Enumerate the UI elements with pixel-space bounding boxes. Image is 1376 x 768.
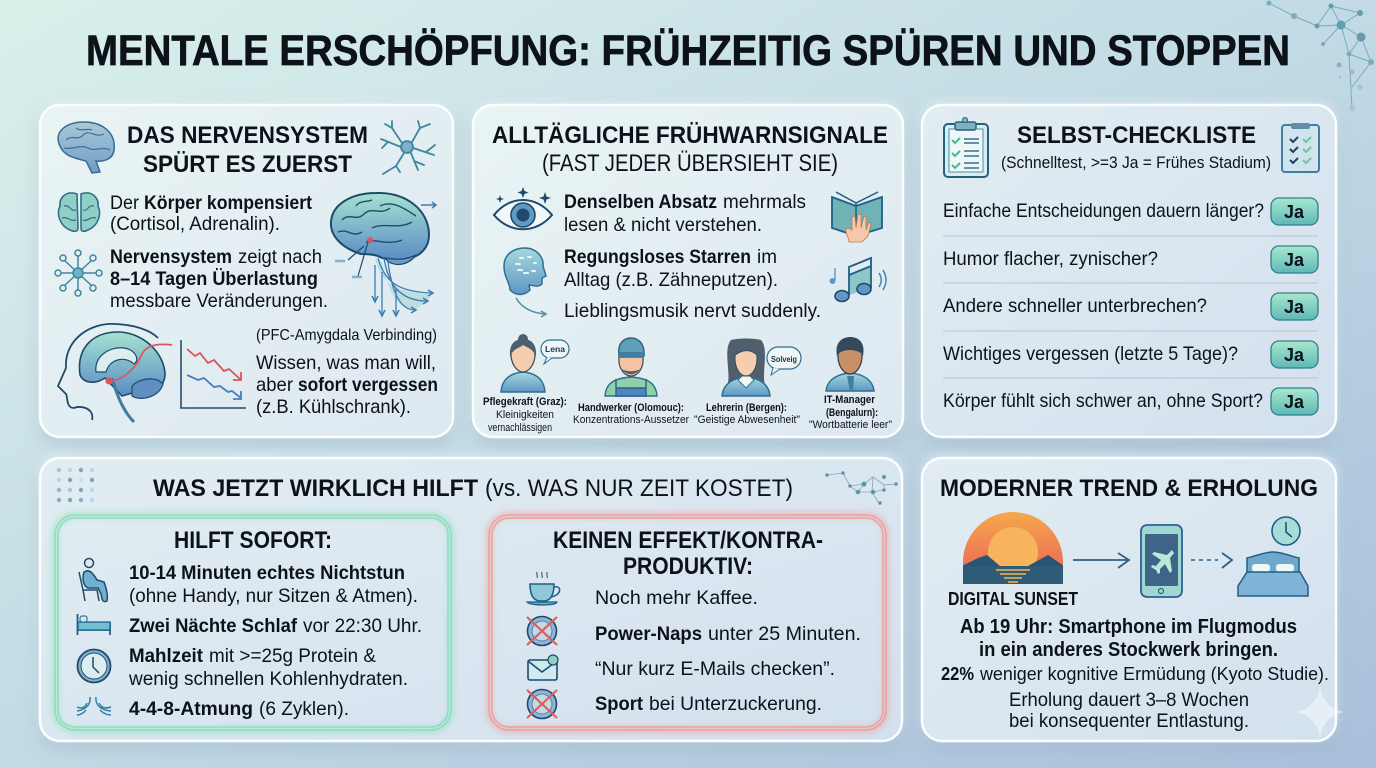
- caption: craftsman: Handwerker (Olomouc):: [578, 402, 684, 414]
- text: favourite music: Lieblingsmusik nervt suddenly.: [564, 300, 821, 322]
- text: motionless staring: im: [757, 246, 777, 268]
- text: knowing: [256, 352, 438, 418]
- text: 22 percent: weniger kognitive Ermüdung (Kyoto Studie).: [979, 663, 1329, 684]
- icon: sitting person: [79, 558, 107, 602]
- heading: what really helps: (vs. WAS NUR ZEIT KOSTET): [485, 475, 793, 502]
- row 3: [943, 293, 1318, 320]
- text: motionless staring: Regungsloses Starren: [564, 246, 751, 268]
- caption: nurse: Kleinigkeiten: [496, 409, 554, 421]
- text: breathing: 4-4-8-Atmung: [129, 698, 253, 720]
- icon: arrow from head: [516, 298, 546, 317]
- caption: teacher: "Geistige Abwesenheit": [694, 414, 800, 426]
- caption: nurse: vernachlässigen: [488, 422, 552, 434]
- icon: neuron: [381, 121, 435, 174]
- icon: sunset: [963, 512, 1063, 584]
- text: two nights: [129, 615, 422, 637]
- caption: teacher: Lehrerin (Bergen):: [706, 402, 787, 414]
- person: nurse: Lena: [545, 345, 566, 354]
- row 4: Wichtiges vergessen (letzte 5 Tage)?: [943, 343, 1238, 365]
- panel: early warning signs: [473, 105, 903, 437]
- text: power naps: Power-Naps: [595, 623, 702, 645]
- text: knowing: sofort vergessen: [298, 374, 438, 396]
- person: IT manager: [826, 337, 874, 391]
- text: body compensates: Der: [110, 192, 139, 214]
- icon: music notes: [830, 258, 886, 302]
- chart: decline: [181, 340, 246, 408]
- text: e-mails: “Nur kurz E-Mails checken”.: [595, 658, 835, 680]
- heading: warning signs: [492, 122, 888, 177]
- text: 22 percent: 22%: [941, 663, 974, 684]
- row 5: Körper fühlt sich schwer an, ohne Sport?: [943, 390, 1263, 412]
- text: body compensates: [110, 192, 312, 235]
- person: nurse: [501, 334, 569, 392]
- caption: IT manager: "Wortbatterie leer": [809, 419, 892, 431]
- text: breathing: (6 Zyklen).: [259, 698, 349, 720]
- text: knowing: Wissen, was man will,: [256, 352, 436, 374]
- arrow: sunset to phone: [1073, 553, 1129, 568]
- person: craftsman: [605, 338, 657, 396]
- text: meal: [128, 645, 408, 690]
- text: knowing: (z.B. Kühlschrank).: [256, 396, 411, 418]
- heading: warning signs: (FAST JEDER ÜBERSIEHT SIE): [542, 150, 838, 177]
- heading: no effect: KEINEN EFFEKT/KONTRA-: [553, 527, 823, 554]
- text: nervous system changes: 8–14 Tagen Überlastung: [110, 267, 318, 290]
- text: body compensates: (Cortisol, Adrenalin).: [110, 213, 280, 235]
- text: doing nothing: [129, 562, 418, 607]
- caption: craftsman: [573, 402, 689, 426]
- arrow head: [1222, 553, 1232, 568]
- text: body compensates: Körper kompensiert: [144, 192, 312, 214]
- text: recovery: Erholung dauert 3–8 Wochen: [1009, 690, 1249, 711]
- person: teacher: [722, 338, 801, 396]
- icon: bed: [1238, 552, 1308, 596]
- icon: large brain with arrows: [331, 193, 436, 316]
- text: from 7pm: Ab 19 Uhr: Smartphone im Flugmodus: [960, 616, 1297, 638]
- icon: network: [55, 250, 102, 296]
- row 3: Andere schneller unterbrechen?: [943, 295, 1207, 317]
- row 1: Einfache Entscheidungen dauern länger?: [943, 200, 1264, 222]
- row 2: Ja: [1284, 250, 1305, 270]
- heading: nervous system: [127, 122, 368, 178]
- text: nervous system changes: messbare Veränderungen.: [110, 290, 328, 312]
- text: meal: Mahlzeit: [129, 645, 203, 667]
- text: recovery: [1009, 690, 1249, 732]
- heading: no effect: PRODUKTIV:: [623, 553, 753, 580]
- text: nervous system changes: zeigt nach: [238, 246, 322, 268]
- icon: clipboard left: [944, 118, 988, 177]
- text: power naps: unter 25 Minuten.: [708, 623, 861, 645]
- text: from 7pm: [960, 616, 1297, 661]
- row 5: Ja: [1284, 392, 1305, 412]
- text: sport: Sport: [595, 693, 643, 715]
- heading: helps immediately: HILFT SOFORT:: [174, 527, 332, 554]
- icon: bed: [78, 614, 110, 635]
- icon: head section: [58, 324, 172, 422]
- caption: IT manager: IT-Manager: [824, 394, 876, 406]
- icon: eye: [494, 187, 552, 229]
- icon: crossed nap: [527, 616, 557, 646]
- heading: nervous system: SPÜRT ES ZUERST: [143, 151, 352, 178]
- label: digital sunset: DIGITAL SUNSET: [948, 589, 1078, 609]
- text: motionless staring: [564, 246, 778, 291]
- icon: clock: [78, 650, 110, 682]
- text: same paragraph: lesen & nicht verstehen.: [564, 214, 762, 236]
- panel: self checklist: [922, 105, 1336, 437]
- caption: IT manager: (Bengalurn):: [826, 407, 878, 419]
- text: coffee: Noch mehr Kaffee.: [595, 587, 758, 609]
- decoration: dot grid: [57, 468, 94, 502]
- heading: checklist: (Schnelltest, >=3 Ja = Frühes Stadium): [1001, 154, 1271, 172]
- icon: coffee cup: [527, 572, 560, 605]
- panel: nervous system: [40, 105, 453, 437]
- caption: nurse: [483, 396, 567, 434]
- row 4: Ja: [1284, 345, 1305, 365]
- heading: checklist: SELBST-CHECKLISTE: [1017, 122, 1256, 149]
- icon: book with hand: [832, 192, 882, 242]
- text: recovery: bei konsequenter Entlastung.: [1009, 711, 1249, 732]
- text: breathing: [129, 698, 349, 720]
- icon: brain: [58, 122, 114, 173]
- panel: modern trend: [922, 458, 1336, 741]
- row 3: Ja: [1284, 297, 1305, 317]
- icon: phone: [1141, 525, 1182, 597]
- text: nervous system changes: Nervensystem: [110, 246, 232, 268]
- text: power naps: [595, 623, 861, 645]
- sparkle: [1296, 687, 1344, 737]
- row 1: Ja: [1284, 202, 1305, 222]
- icon: head with thinking dots: [504, 248, 546, 294]
- icon: clipboard right: [1282, 123, 1319, 172]
- row 2: [943, 246, 1318, 273]
- text: two nights: Zwei Nächte Schlaf: [129, 615, 297, 637]
- text: PFC label: (PFC-Amygdala Verbinding): [256, 327, 437, 344]
- text: nervous system changes: [110, 246, 328, 312]
- text: from 7pm: in ein anderes Stockwerk bringen.: [979, 639, 1278, 661]
- heading: nervous system: DAS NERVENSYSTEM: [127, 122, 368, 149]
- heading: checklist: [1001, 122, 1271, 172]
- row 4: [943, 341, 1318, 368]
- panel: what helps: [40, 458, 902, 741]
- text: two nights: vor 22:30 Uhr.: [303, 615, 422, 637]
- icon: envelope: [528, 655, 558, 680]
- panel: helps immediately: [55, 515, 451, 730]
- icon: two hemispheres: [58, 193, 100, 231]
- text: doing nothing: (ohne Handy, nur Sitzen & Atmen).: [129, 585, 418, 607]
- text: doing nothing: 10-14 Minuten echtes Nichtstun: [129, 562, 405, 584]
- icon: clock: [1272, 517, 1300, 545]
- heading: no effect: [553, 527, 823, 580]
- heading: warning signs: ALLTÄGLICHE FRÜHWARNSIGNALE: [492, 122, 888, 149]
- caption: nurse: Pflegekraft (Graz):: [483, 396, 567, 408]
- row 2: Humor flacher, zynischer?: [943, 248, 1158, 270]
- text: knowing: aber: [256, 374, 293, 396]
- caption: teacher: [694, 402, 800, 426]
- icon: crossed sport: [527, 690, 557, 718]
- text: same paragraph: Denselben Absatz: [564, 191, 717, 213]
- text: meal: mit >=25g Protein &: [209, 645, 376, 667]
- network decoration top right: [1266, 0, 1374, 111]
- decoration: network: [826, 472, 898, 505]
- text: motionless staring: Alltag (z.B. Zähneputzen).: [564, 269, 778, 291]
- caption: craftsman: Konzentrations-Aussetzer: [573, 414, 689, 426]
- person: teacher: Solveig: [771, 355, 797, 364]
- heading: trend: MODERNER TREND & ERHOLUNG: [940, 475, 1318, 502]
- arrow: phone to bed: [1191, 559, 1218, 561]
- text: meal: wenig schnellen Kohlenhydraten.: [128, 668, 408, 690]
- heading: what really helps: [153, 475, 793, 502]
- text: sport: bei Unterzuckerung.: [649, 693, 822, 715]
- panel: no effect: [489, 515, 886, 730]
- heading: what really helps: WAS JETZT WIRKLICH HILFT: [153, 475, 478, 502]
- text: same paragraph: mehrmals: [723, 191, 806, 213]
- text: same paragraph: [564, 191, 806, 236]
- caption: IT manager: [809, 394, 892, 431]
- icon: breathing: [77, 697, 111, 715]
